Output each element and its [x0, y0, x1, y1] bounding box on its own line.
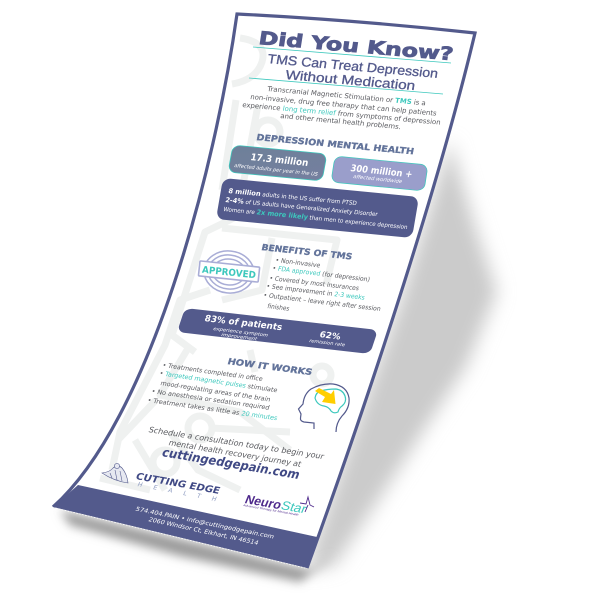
call to action: mental health recovery journey at	[167, 438, 303, 469]
panel: outcomes: experience symptom	[212, 326, 269, 339]
list: benefits: • Non-invasive	[274, 256, 321, 269]
list: how it works	[146, 361, 279, 422]
subtitle line 2: Without Medication	[285, 67, 416, 93]
list: benefits: • Covered by most insurances	[268, 274, 361, 292]
intro text: non-invasive, drug free therapy that can help patients	[250, 93, 438, 118]
panel: outcomes: remission rate	[308, 338, 346, 348]
intro text: experience long term relief from symptoms of depression	[242, 101, 441, 127]
list: how it works: mood-regulating areas of the brain	[159, 379, 272, 404]
list: benefits: • FDA approved (for depression)	[271, 264, 371, 284]
icon: logo emblem	[102, 463, 128, 483]
footer address: 2060 Windsor Ct, Elkhart, IN 46514	[147, 516, 260, 547]
icon: approved stamp: APPROVED	[201, 265, 256, 281]
icon: approved stamp	[197, 248, 261, 296]
heading: how it works: HOW IT WORKS	[226, 357, 313, 378]
list: benefits	[262, 256, 382, 313]
list: benefits: finishes	[266, 302, 291, 313]
intro text: Transcranial Magnetic Stimulation or TMS is a	[266, 85, 426, 107]
logo: NeuroStar: Neuro	[243, 493, 284, 512]
panel: outcomes: improvement	[220, 332, 258, 342]
background circuit watermark	[100, 38, 337, 490]
stat card: 300 million: 300 million +	[349, 163, 413, 180]
panel: facts: 2-4% of US adults have Generalized Anxiety Disorder	[225, 196, 379, 218]
panel: outcomes: 83% of patients	[203, 314, 283, 333]
stat card: 300 million: affected worldwide	[353, 174, 403, 185]
stat card: 17.3 million	[228, 145, 327, 181]
icon: head with brain	[298, 384, 349, 432]
logo: NeuroStar: Advanced Therapy for Mental Health	[243, 503, 300, 517]
logo: Cutting Edge Health	[102, 463, 222, 503]
stat card: 17.3 million: 17.3 million	[249, 152, 310, 169]
list: benefits: • See improvement in 2-3 weeks	[265, 282, 366, 302]
website: cuttingedgepain.com	[160, 445, 303, 482]
intro text	[242, 85, 441, 131]
list: how it works: • No anesthesia or sedation required	[150, 387, 271, 412]
paper border	[53, 14, 475, 568]
intro text: and other mental health problems.	[280, 112, 402, 131]
heading: benefits of TMS: BENEFITS OF TMS	[260, 243, 353, 262]
shadow: bottom	[60, 510, 335, 582]
logo: NeuroStar	[243, 493, 314, 517]
subtitle line 1: TMS Can Treat Depression	[267, 51, 439, 81]
call to action: Schedule a consultation today to begin your	[147, 425, 326, 461]
list: how it works: • Targeted magnetic pulses stimulate	[158, 369, 279, 394]
panel: outcomes	[177, 308, 378, 354]
panel: facts: Women are 2x more likely than men to experience depression	[223, 205, 409, 231]
heading: depression mental health: DEPRESSION MENTAL HEALTH	[255, 133, 415, 157]
footer band	[53, 485, 317, 568]
logo: NeuroStar: Star	[279, 499, 309, 516]
list: benefits: • Outpatient – leave right after session	[262, 291, 382, 313]
paper sheet	[53, 14, 475, 568]
stat card: 300 million	[331, 156, 428, 191]
logo: Cutting Edge Health: CUTTING EDGE	[134, 472, 222, 497]
title: Did You Know?	[257, 28, 455, 65]
footer dashed edge	[53, 508, 307, 568]
list: how it works: • Treatment takes as little as 20 minutes	[146, 396, 279, 422]
subtitle underline	[249, 78, 443, 94]
shadow: right side	[305, 140, 497, 570]
panel: facts: 8 million adults in the US suffer from PTSD	[228, 187, 358, 207]
stat card: 17.3 million: affected adults per year in the US	[234, 163, 319, 178]
panel: facts	[216, 178, 419, 238]
footer contact: 574.404.PAIN • info@cuttingedgepain.com	[134, 506, 275, 540]
list: how it works: • Treatments completed in office	[161, 361, 264, 383]
logo: Cutting Edge Health: HEALTH	[136, 481, 218, 503]
title underline	[253, 47, 451, 63]
panel: outcomes: 62%	[318, 330, 342, 343]
